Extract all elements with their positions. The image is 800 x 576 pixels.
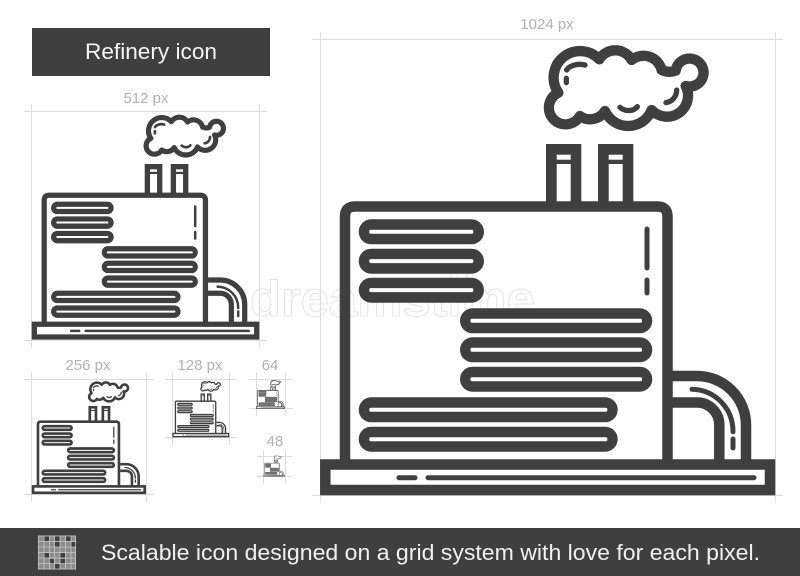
footer text: Scalable icon designed on a grid system with love for each pixel. (101, 540, 760, 565)
size labels: 1024 px (520, 16, 574, 33)
icon: refinery 48 px (264, 456, 284, 476)
size frames (24, 32, 783, 503)
size labels: 256 px (65, 357, 111, 374)
title banner: Refinery icon (85, 39, 217, 64)
icon: refinery 64 px (256, 380, 285, 408)
smoke cloud (549, 50, 704, 126)
size labels: 64 (262, 357, 278, 374)
title banner (32, 28, 270, 76)
icon: refinery 1024 px (325, 50, 770, 490)
watermark: dreamstime (250, 271, 535, 327)
size labels: 48 (267, 433, 283, 450)
size labels: 512 px (123, 90, 169, 107)
icon: pixel grid (38, 536, 76, 570)
coils (359, 219, 652, 452)
footer bar (0, 528, 800, 576)
tank highlight (644, 229, 650, 293)
icon: refinery 128 px (173, 382, 229, 437)
size labels (65, 16, 574, 450)
size labels: 128 px (177, 357, 223, 374)
pipe (672, 376, 746, 462)
base plate (325, 464, 770, 490)
icon: refinery 256 px (33, 382, 145, 493)
chimneys (546, 144, 633, 206)
tank body (345, 206, 668, 462)
icon: refinery 512 px (34, 117, 257, 337)
